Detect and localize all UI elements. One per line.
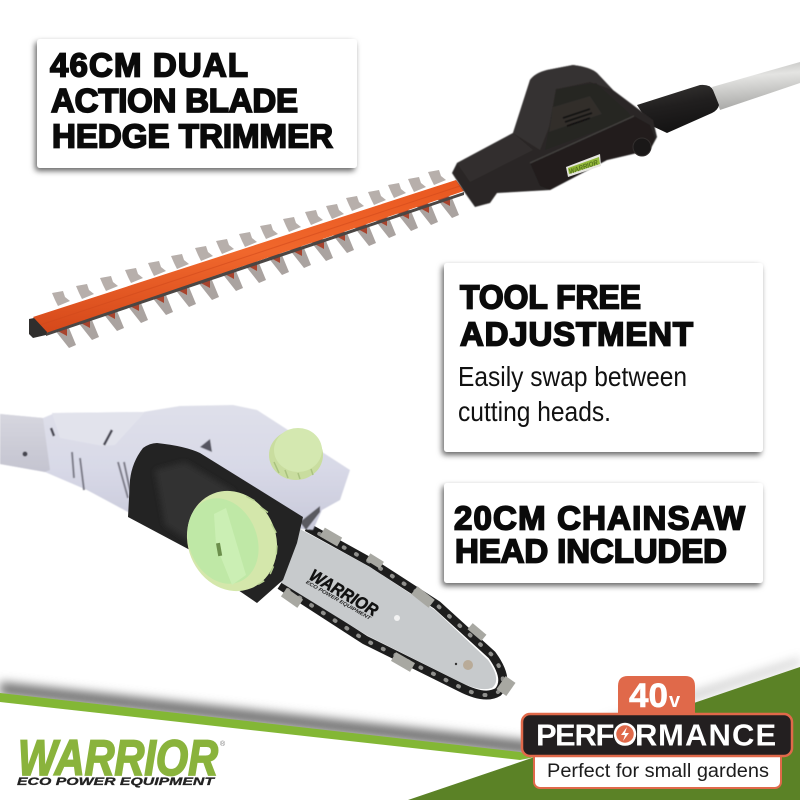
Warrior logo: ECO POWER EQUIPMENT	[17, 776, 216, 788]
light grey pole and housing	[0, 405, 350, 530]
small green knob	[269, 428, 323, 480]
orange blade bar	[29, 180, 464, 338]
icon: lightning bolt in O	[615, 724, 635, 744]
heading text	[50, 46, 333, 154]
panel body text: cutting heads.	[458, 396, 611, 427]
chain cutters	[281, 528, 516, 696]
40v performance badge	[522, 676, 792, 788]
black motor housing	[452, 65, 657, 207]
bar logo: WARRIOR	[306, 566, 382, 620]
panel body text: Easily swap between	[458, 361, 687, 392]
chainsaw head	[0, 405, 516, 696]
Warrior logo: WARRIOR	[18, 730, 218, 786]
housing logo label: WARRIOR	[568, 160, 599, 176]
large green knob	[172, 477, 292, 605]
heading text: 46CM DUAL	[50, 46, 248, 84]
tagline box: Perfect for small gardens	[547, 761, 769, 782]
Warrior logo: ®	[220, 740, 226, 748]
40v tab: v	[669, 690, 681, 712]
panel heading	[460, 278, 693, 352]
rubber grip	[637, 85, 719, 133]
panel: chainsaw heading	[444, 483, 763, 583]
blade teeth lower	[54, 194, 459, 348]
blade teeth upper	[52, 170, 446, 306]
bar logo: ECO POWER EQUIPMENT	[304, 580, 373, 622]
aluminium pole	[712, 62, 800, 110]
bar holes	[394, 615, 473, 670]
40v tab: 40	[629, 677, 668, 715]
heading text: 20CM CHAINSAW	[454, 500, 746, 536]
housing button	[633, 138, 651, 156]
panel heading: ADJUSTMENT	[460, 316, 693, 352]
40v tab	[618, 676, 695, 716]
performance box: PERFORMANCE	[536, 718, 776, 752]
guide bar and chain	[280, 527, 503, 695]
black cover	[128, 443, 303, 603]
dark green corner triangle	[408, 667, 800, 800]
heading text	[454, 500, 746, 570]
tagline box	[534, 750, 781, 788]
heading text: HEDGE TRIMMER	[52, 118, 333, 154]
housing logo label	[566, 154, 601, 177]
panel: tool free adjustment	[444, 263, 763, 452]
green diagonal stripe	[0, 693, 535, 760]
hedge trimmer head	[29, 62, 800, 348]
panel: hedge trimmer heading	[37, 39, 357, 168]
heading text: HEAD INCLUDED	[455, 532, 727, 570]
panel body text	[458, 361, 687, 427]
panel heading: TOOL FREE	[460, 278, 641, 316]
cover highlight	[155, 462, 235, 545]
heading text: ACTION BLADE	[51, 82, 298, 119]
